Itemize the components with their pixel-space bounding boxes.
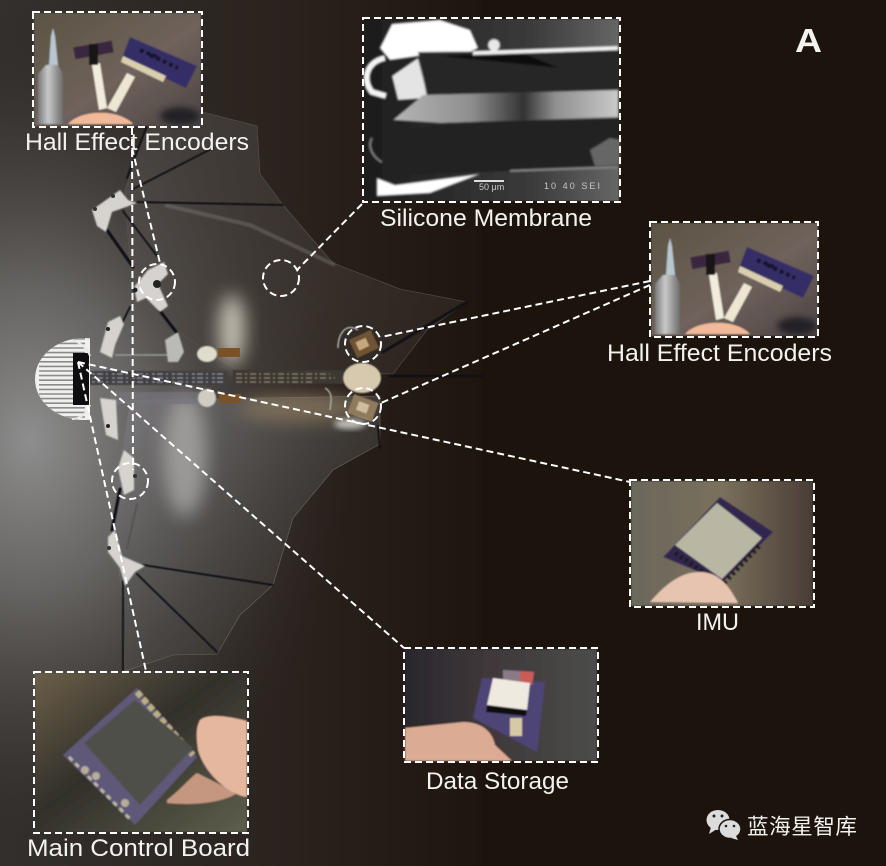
upper wing membrane <box>125 112 467 374</box>
control board photo <box>35 673 247 832</box>
label: Hall Effect Encoders <box>25 129 249 156</box>
panel: main control board <box>27 672 250 862</box>
SD board photo <box>405 649 597 761</box>
scale bar: 10 40 SEI <box>544 181 600 191</box>
callout markers <box>112 260 381 499</box>
spine <box>90 354 363 404</box>
dashed leader lines <box>78 128 650 671</box>
scale bar: 50 μm <box>479 182 504 192</box>
panel: hall effect encoders, right <box>607 222 832 367</box>
motors <box>93 194 241 550</box>
label: Silicone Membrane <box>380 205 592 232</box>
label: Data Storage <box>426 768 569 795</box>
panel: IMU <box>630 480 814 636</box>
panel: data storage <box>404 648 598 795</box>
panel: hall effect encoders, upper left <box>25 12 249 156</box>
label: Main Control Board <box>27 835 250 862</box>
illustration: bat robot <box>30 112 482 671</box>
watermark <box>706 810 857 840</box>
encoders at tail <box>325 328 379 429</box>
icon: wechat bubbles <box>706 810 741 840</box>
wing reflections <box>163 205 362 517</box>
dashed frame <box>34 672 248 833</box>
carbon fibre rods <box>107 126 482 670</box>
panel label: A: A <box>795 22 822 59</box>
label: Hall Effect Encoders <box>607 340 832 367</box>
encoder photo copy <box>651 223 818 336</box>
dashed frame <box>630 480 814 607</box>
SEM micrograph <box>364 19 620 201</box>
dashed frame <box>650 222 818 337</box>
IMU photo <box>631 481 813 606</box>
white joints <box>92 190 381 586</box>
encoder photo <box>34 13 201 126</box>
scale bar <box>474 180 600 192</box>
dashed frame <box>363 18 620 202</box>
dashed frame <box>404 648 598 762</box>
label: IMU <box>696 609 739 636</box>
watermark text: 蓝海星智库 <box>747 814 857 839</box>
ribbed head dome <box>35 338 91 420</box>
dashed frame <box>33 12 202 127</box>
lower wing membrane <box>112 396 380 671</box>
panel: silicone membrane <box>363 18 620 232</box>
